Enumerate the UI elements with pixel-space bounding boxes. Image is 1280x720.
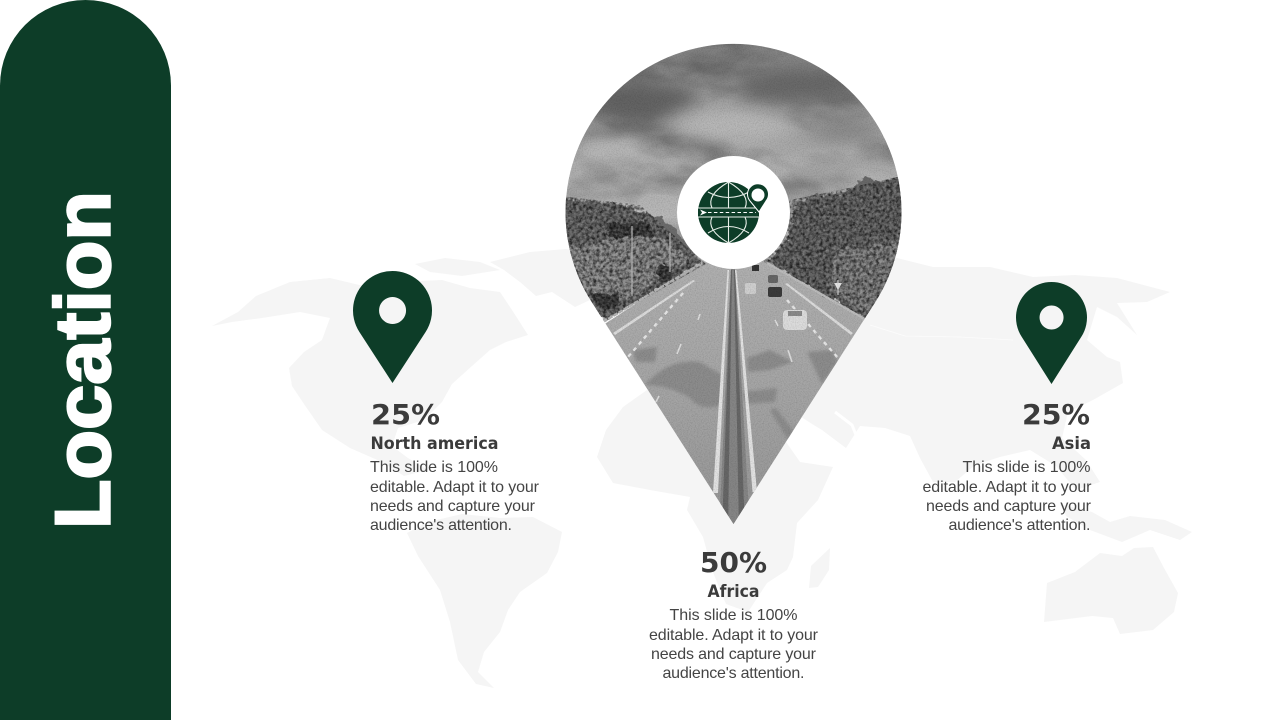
- photo: road: [606, 262, 864, 524]
- africa marker text: [649, 546, 819, 682]
- icon: map pin: [1016, 282, 1087, 384]
- description: This slide is 100%: [962, 459, 1090, 476]
- description: audience's attention.: [662, 665, 804, 682]
- icon: map pin: [353, 271, 432, 383]
- description: needs and capture your: [370, 498, 536, 515]
- photo: grain: [560, 40, 910, 530]
- region name: North america: [370, 434, 498, 454]
- description: [370, 459, 540, 534]
- percentage: 25%: [1022, 398, 1090, 431]
- percentage: 25%: [371, 398, 440, 431]
- map: australia: [1044, 547, 1178, 634]
- north america marker: [353, 271, 540, 534]
- world map background: [212, 249, 1192, 688]
- photo: cars: [745, 265, 807, 330]
- icon: globe with road and location pin: [698, 182, 768, 243]
- description: needs and capture your: [651, 646, 817, 663]
- asia marker: [922, 282, 1092, 534]
- white circle with globe icon: [677, 156, 790, 269]
- description: editable. Adapt it to your: [649, 627, 819, 644]
- map: north america: [212, 278, 528, 476]
- map: south america: [407, 514, 562, 688]
- photo: sky: [560, 40, 910, 280]
- description: needs and capture your: [926, 498, 1092, 515]
- description: This slide is 100%: [670, 607, 798, 624]
- map: eurasia: [700, 258, 1170, 490]
- description: audience's attention.: [948, 517, 1090, 534]
- description: [649, 607, 819, 682]
- region name: Africa: [708, 582, 760, 602]
- region name: Asia: [1052, 434, 1091, 454]
- description: editable. Adapt it to your: [922, 479, 1092, 496]
- map: madagascar: [809, 548, 830, 588]
- percentage: 50%: [700, 546, 767, 579]
- title: Location: [38, 191, 126, 529]
- map: indonesia: [1060, 504, 1192, 542]
- map: arctic islands: [415, 249, 600, 307]
- description: [922, 459, 1092, 534]
- description: audience's attention.: [370, 517, 512, 534]
- photo: right trees: [764, 174, 910, 322]
- title panel: [0, 0, 171, 720]
- description: This slide is 100%: [370, 459, 498, 476]
- photo: left trees: [560, 196, 706, 322]
- large map pin with highway photo: [560, 40, 910, 540]
- description: editable. Adapt it to your: [370, 479, 540, 496]
- map: africa: [597, 388, 833, 612]
